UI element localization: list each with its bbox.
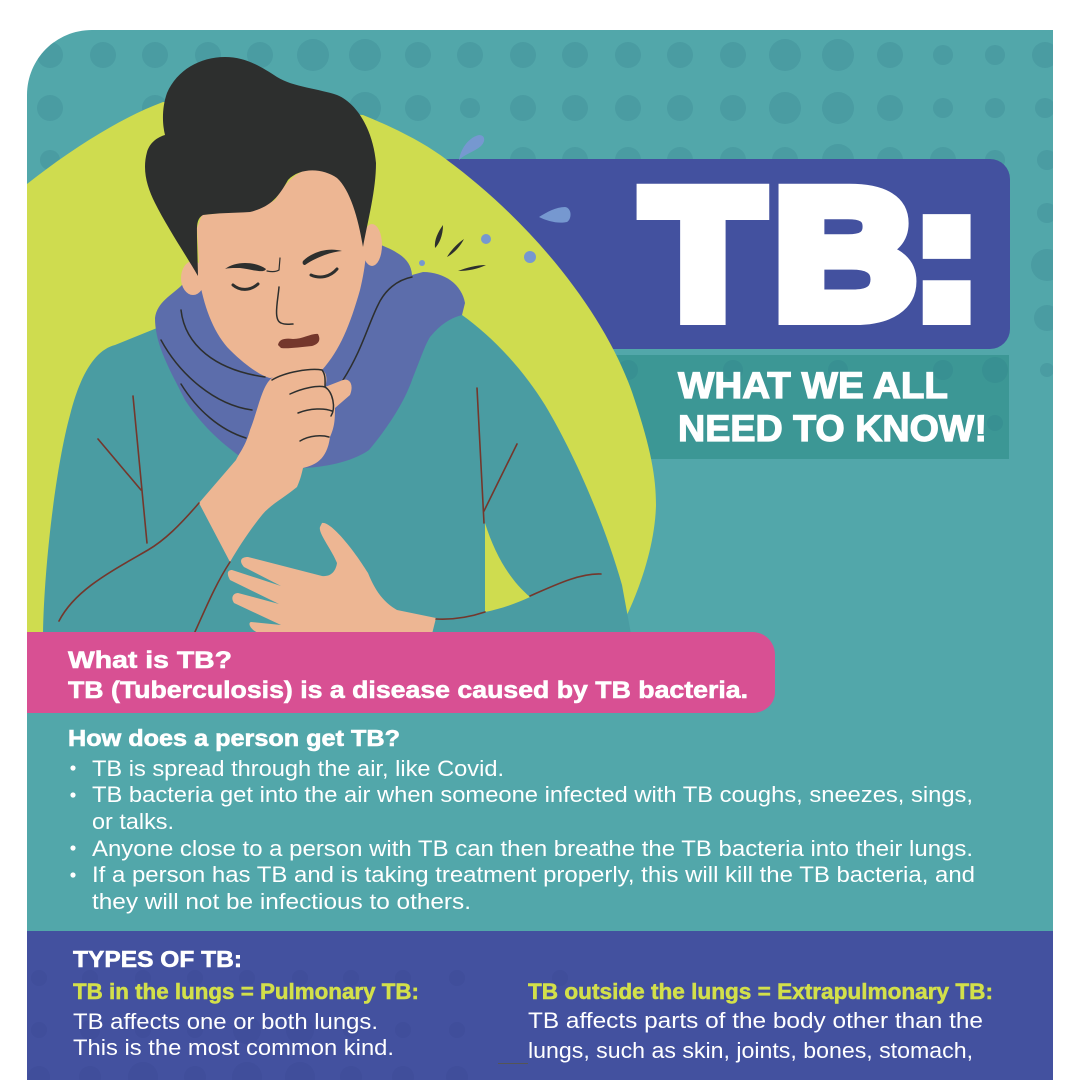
- panel: subtitle box: [600, 355, 1009, 459]
- cough sparks: [435, 225, 486, 271]
- column: extrapulmonary TB: lungs, such as skin, joints, bones, stomach,: [528, 1038, 973, 1063]
- column: pulmonary TB: This is the most common kind.: [73, 1035, 394, 1060]
- panel: what is TB banner: [27, 632, 775, 713]
- bullet list: TB bacteria get into the air when someone infected with TB coughs, sneezes, sings,: [92, 782, 973, 807]
- lower hand on chest: [228, 523, 436, 634]
- panel: title banner: [430, 153, 1010, 356]
- title: TB: T: [643, 153, 763, 356]
- eyes and nose: [233, 258, 337, 324]
- column: pulmonary TB: [73, 979, 419, 1060]
- panel: subtitle box: NEED TO KNOW!: [678, 408, 987, 449]
- cough droplets: [419, 135, 571, 266]
- subtitle text: WHAT WE ALL: [678, 365, 948, 406]
- column: extrapulmonary TB: TB outside the lungs = Extrapulmonary TB:: [528, 979, 993, 1004]
- column: pulmonary TB: TB in the lungs = Pulmonary TB:: [73, 979, 419, 1004]
- bullet list: they will not be infectious to others.: [92, 889, 471, 914]
- column: extrapulmonary TB: TB affects parts of the body other than the: [528, 1008, 983, 1033]
- yellow gap under the arm: [485, 523, 530, 612]
- body sweater: [43, 315, 631, 634]
- title: TB: [643, 153, 978, 356]
- sweater seams: [59, 388, 601, 634]
- mouth: [278, 334, 319, 348]
- face: [197, 168, 366, 378]
- bullet dots: [70, 765, 76, 878]
- section heading: How does a person get TB?: [68, 725, 400, 751]
- types heading: TYPES OF TB:: [73, 946, 242, 972]
- title: TB: B: [774, 153, 917, 356]
- scarf: [155, 243, 465, 468]
- panel: what is TB banner: TB (Tuberculosis) is a disease caused by TB bacteria.: [68, 677, 748, 704]
- bullet list: TB is spread through the air, like Covid.: [92, 756, 504, 781]
- illustration: coughing person: [43, 57, 631, 634]
- scarf fold lines: [161, 277, 412, 438]
- column: extrapulmonary TB: [528, 979, 993, 1063]
- panel: types of TB: [27, 931, 1053, 1080]
- eyebrows: [225, 250, 342, 271]
- title: TB: :: [915, 153, 978, 354]
- bullet list: [92, 756, 975, 914]
- raised arm and fist: [199, 370, 352, 562]
- ears: [181, 224, 382, 295]
- banner text: What is TB?: [68, 647, 232, 674]
- yellow-green blob: [27, 102, 656, 634]
- section: how does a person get TB: [68, 725, 975, 914]
- fist finger lines: [272, 369, 333, 441]
- column: pulmonary TB: TB affects one or both lungs.: [73, 1009, 378, 1034]
- hair: [145, 57, 376, 276]
- bullet list: Anyone close to a person with TB can then breathe the TB bacteria into their lungs.: [92, 836, 973, 861]
- bullet list: If a person has TB and is taking treatment properly, this will kill the TB bacteria, and: [92, 862, 975, 887]
- dot pattern: [37, 39, 1063, 377]
- bullet list: or talks.: [92, 809, 174, 834]
